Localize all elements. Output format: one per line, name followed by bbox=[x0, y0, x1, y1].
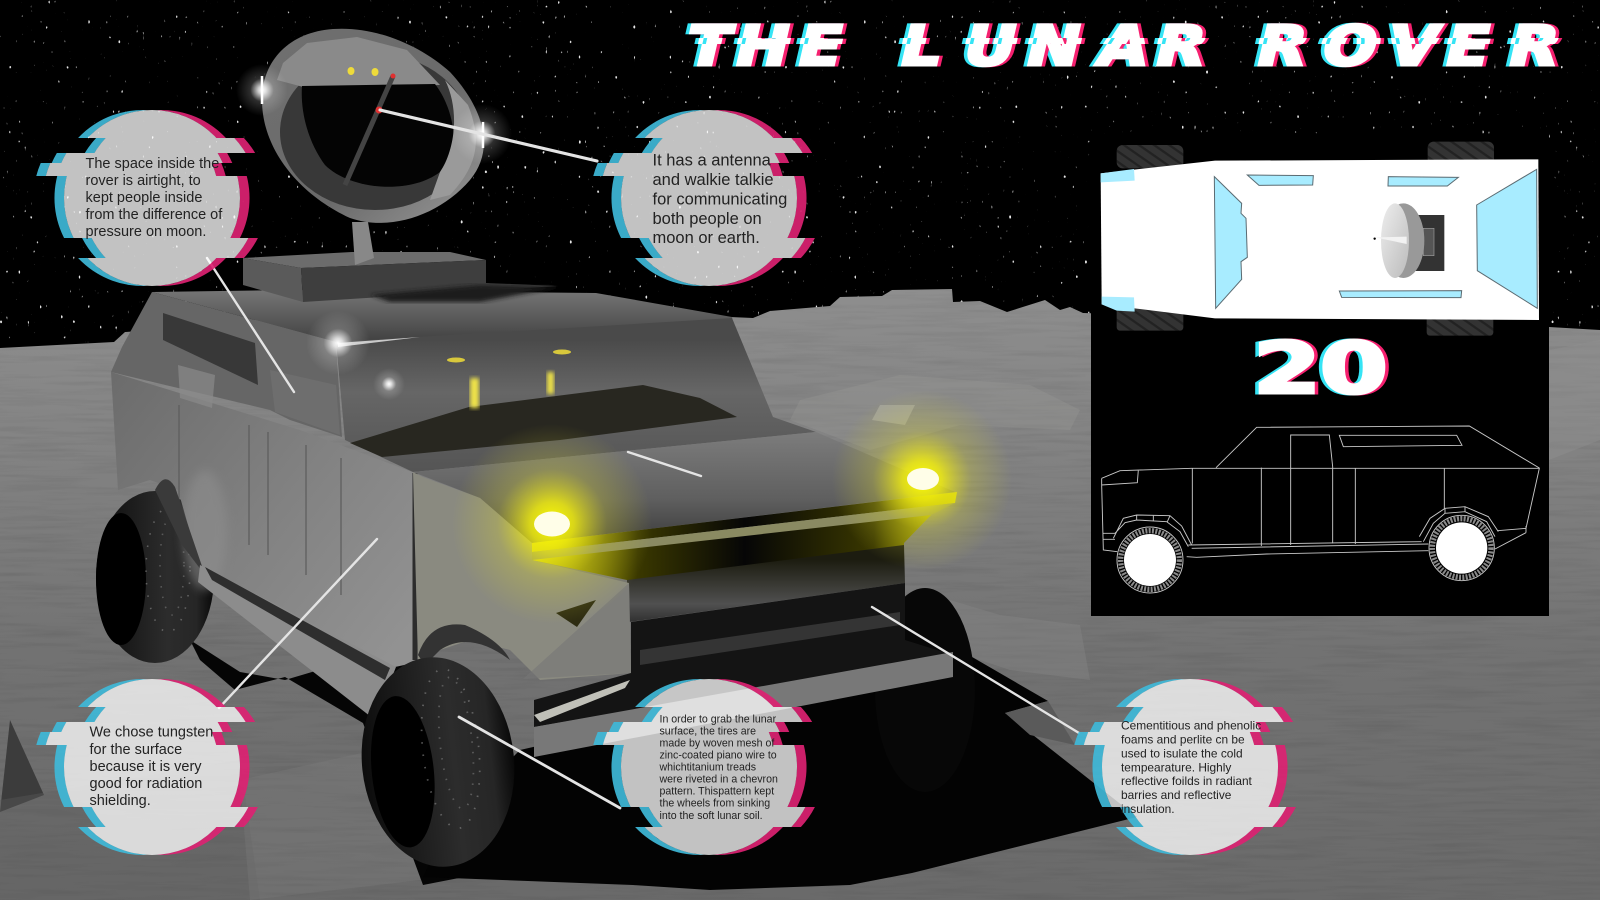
title: THE LUNAR ROVER bbox=[680, 15, 1566, 79]
top view windows bbox=[1101, 169, 1537, 312]
rover skirt bbox=[198, 565, 396, 720]
callout text: tungsten: because it is very bbox=[90, 759, 202, 775]
callout text: airtight: rover is airtight, to bbox=[86, 173, 201, 189]
callout text: insulation: insulation. bbox=[1121, 802, 1175, 816]
satellite dish bbox=[262, 29, 484, 223]
panel: blueprint views bbox=[1091, 135, 1549, 616]
callout text: tires: surface, the tires are bbox=[660, 726, 756, 738]
top view tyres bbox=[1117, 142, 1494, 336]
front fender bbox=[413, 472, 631, 680]
top view of rover bbox=[1101, 142, 1539, 336]
callout text: antenna: It has a antenna bbox=[652, 152, 772, 170]
top view dish bbox=[1373, 203, 1444, 278]
background: lunar ground bbox=[0, 280, 1600, 900]
callout text: tungsten: good for radiation bbox=[90, 776, 202, 792]
headlights bbox=[534, 468, 939, 536]
callout text: tungsten: We chose tungsten bbox=[90, 724, 213, 740]
rover side panel bbox=[111, 372, 418, 667]
side view wireframe bbox=[1102, 426, 1539, 593]
callout text: insulation: tempearature. Highly bbox=[1121, 760, 1231, 774]
callout text: tires: In order to grab the lunar bbox=[660, 714, 777, 726]
shadows under rover bbox=[190, 640, 1137, 890]
front wheel bbox=[351, 650, 525, 874]
callout text: insulation: foams and perlite cn be bbox=[1121, 732, 1245, 746]
callout text: tires: into the soft lunar soil. bbox=[660, 810, 763, 822]
roof bbox=[152, 290, 736, 342]
callout text: antenna: moon or earth. bbox=[652, 229, 760, 247]
lens flares bbox=[236, 64, 512, 400]
rear wheel bbox=[96, 491, 214, 663]
lower bumper bbox=[534, 583, 953, 757]
callout text: antenna: for communicating bbox=[652, 190, 787, 208]
callout text: tires: whichtitanium treads bbox=[658, 762, 756, 774]
callout: tungsten surface bbox=[33, 679, 268, 855]
callout text: airtight: kept people inside bbox=[86, 190, 202, 206]
callout text: tires: made by woven mesh of bbox=[660, 738, 774, 750]
callout text: antenna: both people on bbox=[652, 210, 762, 228]
callout text: insulation: Cementitious and phenolic bbox=[1121, 718, 1261, 732]
panel background bbox=[1091, 135, 1549, 616]
top view body bbox=[1101, 159, 1539, 320]
front grille and yellow bar bbox=[532, 492, 957, 622]
windshield bbox=[336, 318, 816, 472]
callout: insulation bbox=[1071, 679, 1306, 855]
callout text: tires: the wheels from sinking bbox=[660, 798, 770, 810]
callout: antenna bbox=[590, 110, 825, 286]
hood bbox=[413, 432, 955, 543]
antenna mast bbox=[352, 222, 374, 265]
callout text: tungsten: shielding. bbox=[90, 793, 151, 809]
callout lines bbox=[207, 110, 1079, 808]
cab side glass bbox=[111, 292, 342, 437]
headlight glow bbox=[452, 390, 1012, 624]
callout text: tires: pattern. Thispattern kept bbox=[660, 786, 774, 798]
antenna base box bbox=[243, 252, 560, 302]
callout text: insulation: used to isulate the cold bbox=[1121, 746, 1243, 760]
callout text: tires: were riveted in a chevron bbox=[658, 774, 778, 786]
number 20: 20 bbox=[1253, 328, 1387, 410]
callout: tires bbox=[590, 679, 825, 855]
rear wheel bbox=[1429, 515, 1494, 581]
callout text: airtight: from the difference of bbox=[86, 207, 223, 223]
rover body bbox=[111, 252, 957, 757]
front wheel bbox=[1117, 527, 1183, 593]
far front wheel bbox=[875, 588, 975, 792]
callout text: insulation: barries and reflective bbox=[1121, 788, 1232, 802]
callout: airtight cabin bbox=[33, 110, 268, 286]
callout text: insulation: reflective foilds in radiant bbox=[1121, 774, 1253, 788]
callout text: tungsten: for the surface bbox=[90, 742, 182, 758]
callout text: tires: zinc-coated piano wire to bbox=[660, 750, 777, 762]
callout text: antenna: and walkie talkie bbox=[652, 171, 774, 189]
callout text: airtight: pressure on moon. bbox=[86, 224, 206, 240]
callout text: airtight: The space inside the bbox=[86, 156, 219, 172]
